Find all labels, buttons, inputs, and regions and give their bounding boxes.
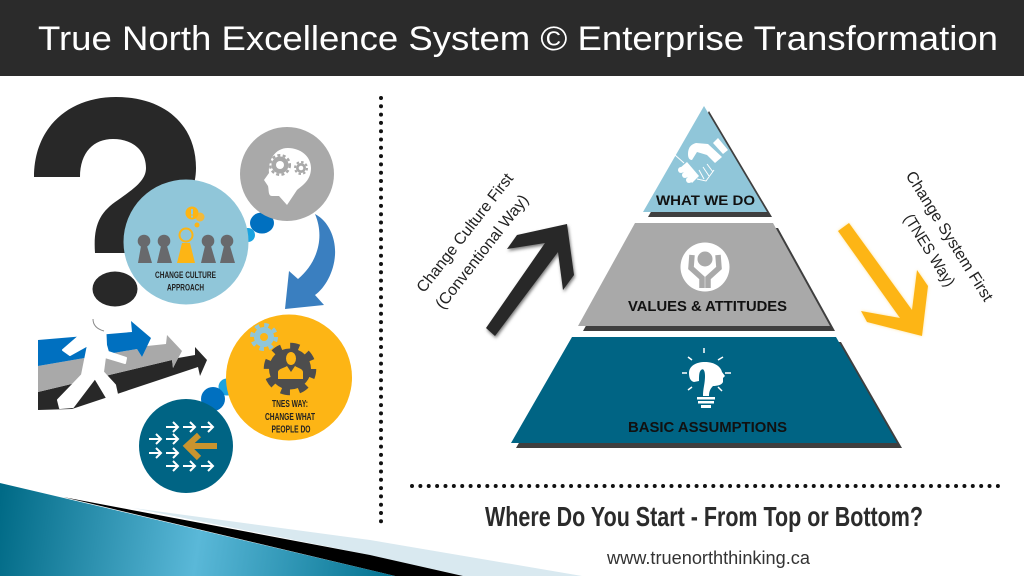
text: change system first: (TNES Way) bbox=[900, 211, 958, 290]
icon: arrows circle bbox=[139, 399, 233, 493]
icon: small light gear bbox=[252, 325, 276, 349]
icon: large question mark bbox=[34, 97, 196, 306]
title: True North Excellence System © Enterprise Transformation bbox=[38, 20, 998, 58]
tier: basic assumptions bbox=[511, 337, 902, 448]
icon: three arrows with runner bbox=[38, 319, 207, 410]
icon: hands holding circle bbox=[680, 242, 730, 292]
arrow: yellow down arrow bbox=[838, 223, 928, 336]
text: change culture first: (Conventional Way) bbox=[433, 192, 532, 313]
tier: values and attitudes bbox=[578, 223, 835, 331]
connector bubbles: bottom bbox=[201, 378, 236, 411]
label: change culture approach bbox=[155, 270, 216, 294]
label: values and attitudes: VALUES & ATTITUDES bbox=[628, 298, 787, 315]
icon: thinking head circle bbox=[240, 127, 334, 221]
label: TNES way bbox=[265, 398, 315, 436]
website url: www.truenorththinking.ca bbox=[606, 548, 811, 568]
icon: question mark bulb bbox=[682, 348, 731, 408]
arrow: black up arrow bbox=[486, 224, 575, 338]
label: TNES way: CHANGE WHAT bbox=[265, 411, 315, 423]
label: change culture approach: APPROACH bbox=[167, 282, 204, 294]
icon: group of people bbox=[138, 206, 235, 263]
header banner bbox=[0, 0, 1024, 76]
gold arrow bbox=[187, 435, 217, 458]
arrow: curved blue arrow bbox=[285, 214, 335, 309]
runner figure bbox=[58, 319, 126, 408]
label: TNES way: TNES WAY: bbox=[272, 398, 308, 410]
panel: TNES way circle bbox=[226, 314, 352, 440]
connector bubbles: top bbox=[241, 212, 274, 242]
white arrows bbox=[149, 422, 213, 471]
vertical dotted divider bbox=[379, 98, 383, 524]
pyramid bbox=[511, 106, 902, 448]
label: what we do: WHAT WE DO bbox=[656, 192, 755, 208]
text: change culture first: Change Culture First bbox=[414, 170, 517, 296]
icon: large gear with person bbox=[267, 346, 313, 392]
label: TNES way: PEOPLE DO bbox=[272, 424, 310, 436]
label: basic assumptions: BASIC ASSUMPTIONS bbox=[628, 419, 787, 436]
icon: handshake bbox=[675, 138, 728, 183]
panel: change culture approach circle bbox=[124, 180, 248, 304]
text: change system first: Change System First bbox=[902, 169, 996, 305]
corner swoosh decoration bbox=[0, 483, 582, 576]
tier: what we do bbox=[643, 106, 772, 217]
horizontal dotted divider bbox=[412, 484, 1000, 488]
label: change culture approach: CHANGE CULTURE bbox=[155, 270, 216, 281]
